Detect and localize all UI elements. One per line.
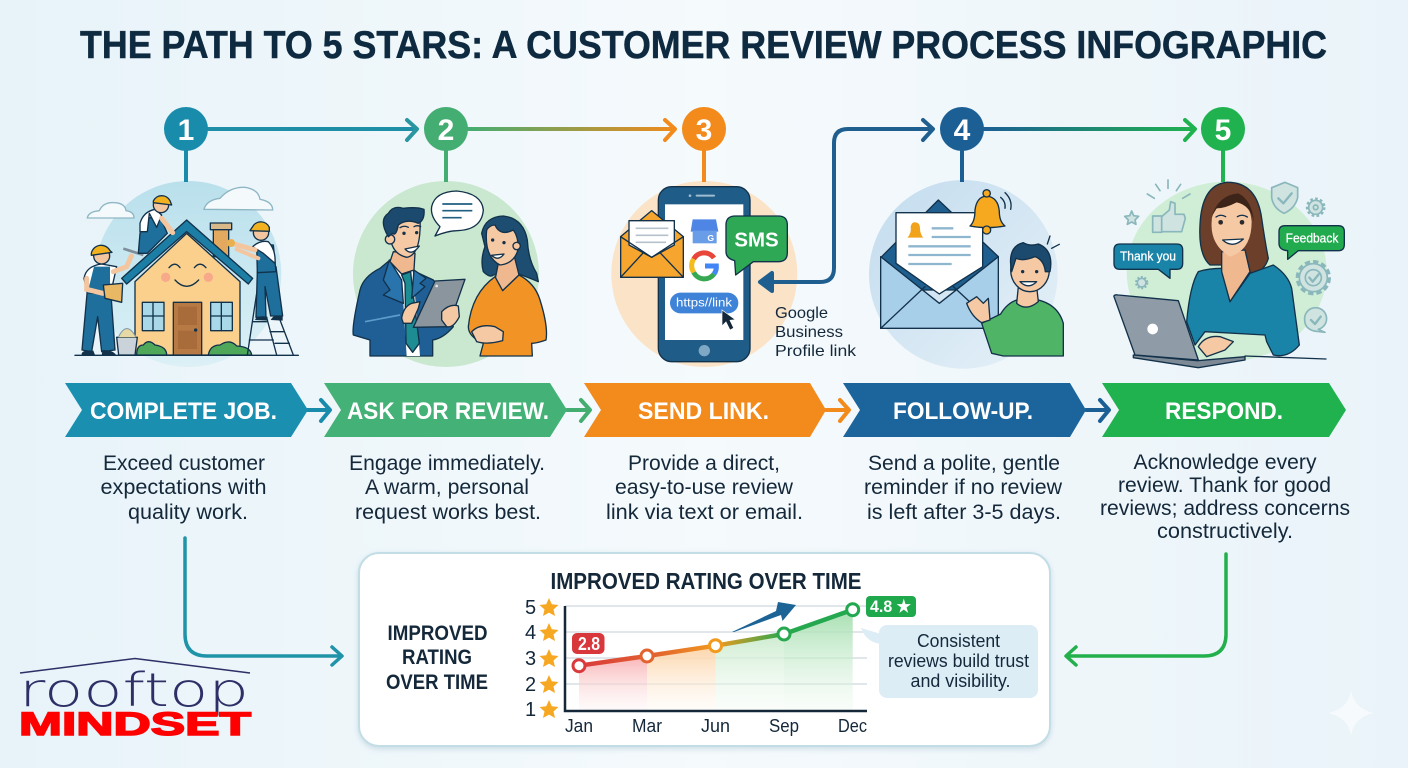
illustration: step 3 phone with review link: SMS — [734, 229, 779, 252]
callout: consistent reviews — [861, 625, 1038, 698]
line chart: Sep — [769, 716, 799, 736]
banner: follow-up — [843, 383, 1086, 437]
line chart: Mar — [632, 716, 662, 736]
text: step 1 description: quality work. — [128, 501, 248, 524]
line chart: Dec — [838, 716, 867, 736]
step number badges — [164, 107, 1245, 151]
side label — [386, 622, 488, 694]
text: step 4 description: reminder if no review — [864, 476, 1063, 499]
trend arrow — [732, 602, 796, 632]
banner: complete job: COMPLETE JOB. — [90, 398, 277, 425]
illustration: step 5 woman responding on laptop: Thank you — [1120, 250, 1176, 264]
arrow: step 4 to step 5 — [984, 120, 1195, 140]
banner: respond: RESPOND. — [1165, 398, 1283, 425]
text: step 2 description: Engage immediately. — [349, 452, 545, 475]
email envelope — [621, 211, 683, 277]
sparkle mark — [1328, 690, 1374, 736]
text: step 5 description: review. Thank for good — [1118, 474, 1331, 497]
text: step 3 description: easy-to-use review — [615, 476, 794, 499]
ladder — [247, 293, 293, 355]
text: step 5 description — [1100, 451, 1350, 543]
line chart: 5 — [525, 597, 536, 619]
logo: rooftop mindset: MINDSET — [19, 706, 252, 742]
line chart: 4 — [525, 622, 536, 644]
side label: IMPROVED — [388, 622, 488, 645]
left roofer — [82, 290, 115, 352]
illustration: step 5 woman responding on laptop — [1114, 180, 1344, 368]
illustration: step 1 roofers and smiling house — [75, 181, 298, 367]
text: step 5 description: reviews; address concerns — [1100, 497, 1350, 520]
text: step 5 description: Acknowledge every — [1134, 451, 1317, 474]
badge 4.8: 4.8 ★ — [870, 597, 912, 616]
right roofer — [256, 267, 283, 317]
logo: rooftop mindset — [19, 658, 252, 742]
line chart: 1 — [525, 699, 536, 721]
banner: ask for review: ASK FOR REVIEW. — [347, 398, 549, 425]
text: step 1 description — [100, 452, 266, 524]
callout: consistent reviews: reviews build trust — [888, 651, 1029, 671]
text: step 1 description: expectations with — [100, 476, 266, 499]
line chart: Jan — [565, 716, 593, 736]
text: step 4 description: is left after 3-5 days. — [867, 501, 1061, 524]
title: THE PATH TO 5 STARS: A CUSTOMER REVIEW PROCESS INFOGRAPHIC — [80, 24, 1327, 67]
text: step 3 description: link via text or email. — [606, 501, 803, 524]
banner: ask for review — [324, 383, 567, 437]
text: step 3 description — [606, 452, 803, 524]
Thank you bubble — [1114, 244, 1183, 278]
illustration: step 5 woman responding on laptop: Feedback — [1286, 231, 1339, 245]
banner: complete job — [65, 383, 308, 437]
line chart: 3 — [525, 648, 536, 670]
illustration: step 3 phone with review link — [611, 181, 797, 367]
SMS bubble — [726, 216, 787, 275]
line chart — [525, 596, 916, 736]
callout: consistent reviews: and visibility. — [910, 671, 1010, 691]
label: Google Business Profile link: Business — [775, 324, 843, 341]
logo: rooftop mindset: rooftop — [19, 663, 249, 717]
speech bubble — [431, 191, 483, 236]
line chart: Jun — [701, 716, 730, 736]
text: step 5 description: constructively. — [1157, 520, 1293, 543]
illustration: step 4 reminder envelope and bell — [869, 180, 1063, 369]
callout: consistent reviews: Consistent — [917, 631, 1000, 651]
line chart: 2 — [525, 674, 536, 696]
text: step 2 description: request works best. — [355, 501, 541, 524]
banner: send link — [584, 383, 826, 437]
step number badges: 2 — [438, 114, 454, 147]
arrow: respond to rating panel — [1066, 554, 1226, 665]
side label: RATING — [402, 646, 472, 669]
arrow: job to rating panel — [185, 538, 342, 665]
badge 2.8: 2.8 — [578, 634, 600, 654]
label: Google Business Profile link: Google — [775, 305, 828, 322]
arrow: step 1 to step 2 — [208, 120, 417, 140]
banner: respond — [1102, 383, 1346, 437]
text: step 1 description: Exceed customer — [103, 452, 265, 475]
step number badges: 4 — [954, 114, 971, 147]
step number badges: 5 — [1215, 114, 1231, 147]
Feedback bubble — [1279, 226, 1344, 259]
panel: improved rating over time — [359, 553, 1050, 746]
chart heading: IMPROVED RATING OVER TIME — [550, 568, 862, 594]
stem connectors — [186, 150, 1223, 182]
text: step 2 description — [349, 452, 545, 524]
store icon — [691, 219, 718, 232]
link pill — [670, 293, 738, 313]
step number badges: 1 — [178, 114, 194, 147]
label: Google Business Profile link: Profile link — [775, 343, 857, 360]
label: Google Business Profile link — [775, 305, 857, 360]
illustration: step 3 phone with review link: https//link — [676, 296, 733, 310]
text: step 2 description: A warm, personal — [365, 476, 529, 499]
arrow: phone link to step 4 — [760, 120, 933, 291]
illustration: step 2 asking customer for review — [353, 181, 547, 367]
Google G icon — [692, 253, 716, 279]
step number badges: 3 — [696, 114, 712, 147]
text: step 4 description: Send a polite, gentle — [868, 452, 1060, 475]
text: step 4 description — [864, 452, 1063, 524]
top roofer — [138, 217, 167, 253]
text: step 3 description: Provide a direct, — [628, 452, 780, 475]
banner: follow-up: FOLLOW-UP. — [893, 398, 1033, 425]
arrow: step 2 to step 3 — [468, 120, 675, 140]
banner: send link: SEND LINK. — [638, 398, 769, 425]
side label: OVER TIME — [386, 671, 488, 694]
illustration: step 3 phone with review link: G — [707, 233, 714, 243]
small arrows between banners — [307, 400, 1109, 421]
